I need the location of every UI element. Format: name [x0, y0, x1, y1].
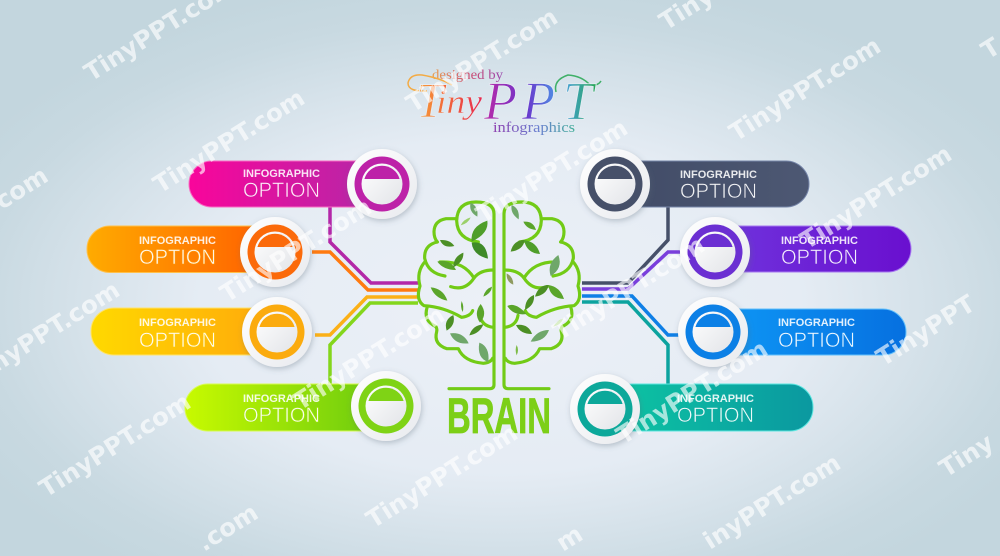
right hemisphere	[504, 202, 580, 389]
watermark layer: TinyPPT.com	[548, 230, 710, 346]
logo: designed by TinyPPT infographics: T	[563, 71, 597, 131]
left hemisphere	[418, 202, 494, 389]
logo: designed by TinyPPT infographics: T	[416, 72, 447, 128]
panel: purple option: OPTION	[781, 246, 858, 269]
watermark layer: TinyPPT.com	[401, 2, 563, 118]
panel: pink option	[189, 149, 417, 219]
watermark layer: Tiny	[934, 428, 999, 483]
watermark layer: TinyPPT.com	[724, 31, 886, 147]
watermark layer: TinyPPT.com	[611, 334, 773, 450]
panel: orange option: INFOGRAPHIC	[139, 235, 216, 247]
title: BRAIN: BRAIN	[447, 388, 551, 444]
watermark layer: TinyPPT.com	[148, 83, 310, 199]
panel: orange option: OPTION	[139, 246, 216, 269]
watermark layer: TinyPPT.com	[471, 113, 633, 229]
connector lines: left side	[312, 207, 418, 384]
panel: yellow option: INFOGRAPHIC	[139, 317, 216, 329]
logo: designed by TinyPPT infographics: infographics	[493, 120, 575, 136]
panel: pink option: OPTION	[243, 179, 320, 202]
logo: designed by TinyPPT infographics: iny	[436, 84, 483, 121]
watermark layer: .com	[192, 498, 263, 556]
panel: lime option: INFOGRAPHIC	[243, 393, 320, 405]
panel: blue option	[678, 297, 906, 367]
watermark layer: TinyPPT.com	[34, 387, 196, 503]
watermark layer: m	[551, 519, 588, 556]
panel: teal option: INFOGRAPHIC	[677, 393, 754, 405]
panel: pink option: INFOGRAPHIC	[243, 168, 320, 180]
logo: designed by TinyPPT infographics: P	[483, 71, 517, 131]
panel: orange option	[87, 217, 310, 287]
panel: lime option: OPTION	[243, 404, 320, 427]
logo: designed by TinyPPT infographics	[408, 68, 601, 136]
panel: lime option	[185, 371, 421, 441]
watermark layer: TinyPPT.com	[215, 192, 377, 308]
panel: dark slate option: INFOGRAPHIC	[680, 169, 757, 181]
panel: blue option: INFOGRAPHIC	[778, 317, 855, 329]
watermark layer: TinyPPT	[871, 289, 980, 372]
panel: teal option: OPTION	[677, 404, 754, 427]
logo: designed by TinyPPT infographics: designed by	[432, 68, 503, 83]
panel: dark slate option: OPTION	[680, 180, 757, 203]
watermark layer: TinyPPT.com	[361, 418, 523, 534]
leaves	[431, 203, 564, 362]
panel: purple option	[680, 217, 911, 287]
panel: dark slate option	[580, 149, 809, 219]
panel: yellow option: OPTION	[139, 329, 216, 352]
logo: designed by TinyPPT infographics: P	[521, 71, 555, 131]
panel: purple option: INFOGRAPHIC	[781, 235, 858, 247]
panel: blue option: OPTION	[778, 329, 855, 352]
panel: teal option	[570, 374, 813, 444]
connector lines: right side	[582, 207, 680, 384]
watermark layer: TinyPPT.com	[288, 300, 450, 416]
icon: brain with leaves	[418, 202, 580, 389]
watermark layer: TinyPPT.com	[795, 139, 957, 255]
panel: yellow option	[91, 297, 312, 367]
watermark layer: inyPPT.com	[698, 448, 846, 555]
